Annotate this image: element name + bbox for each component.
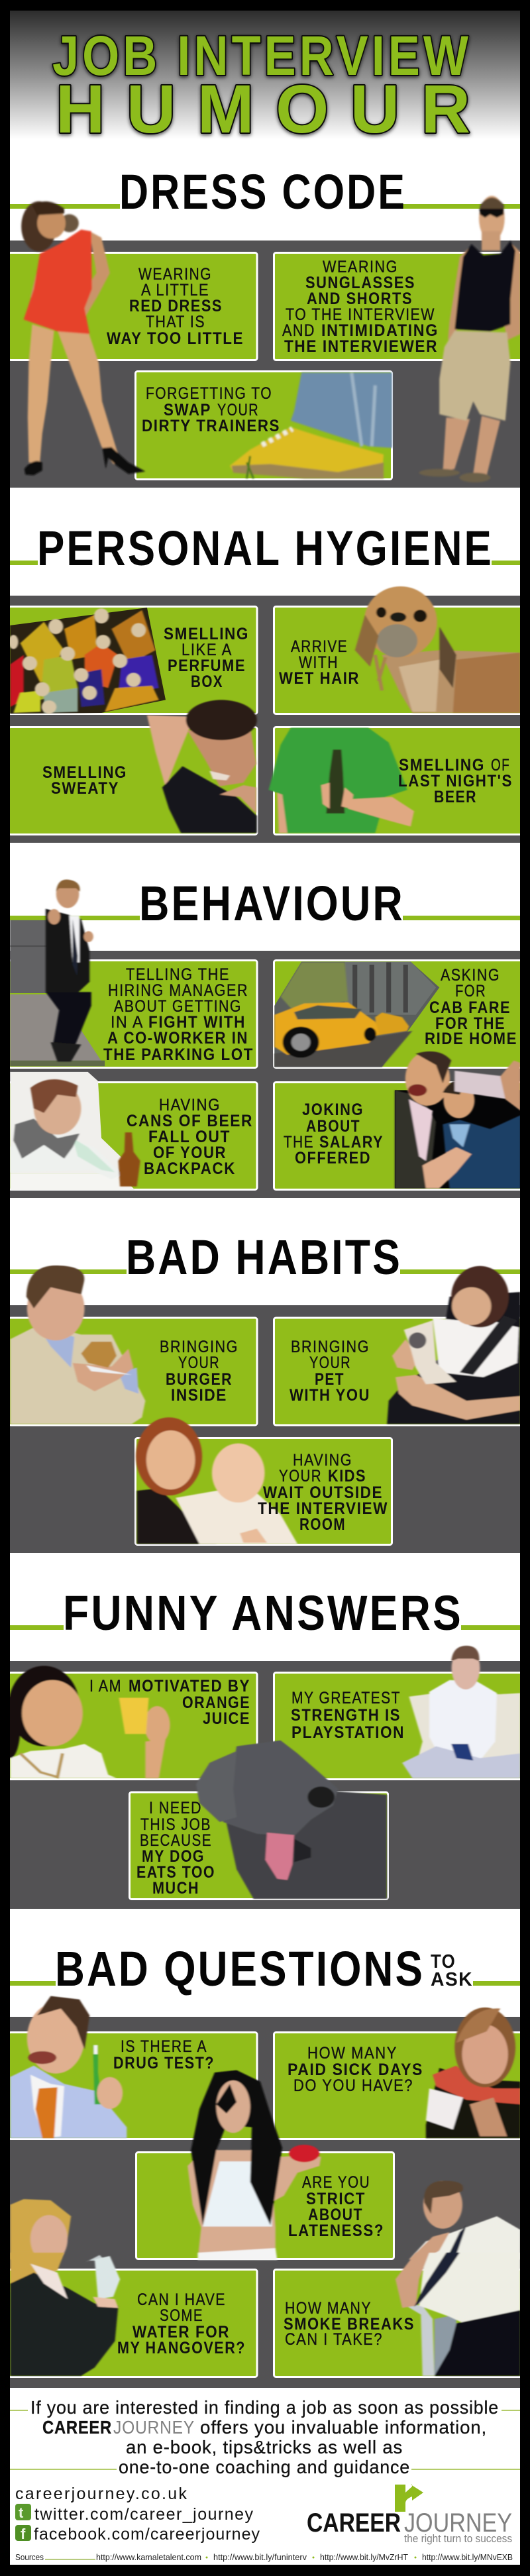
text: cans of beer: CANS OF BEER [127, 1112, 253, 1130]
panel: dress code [9, 164, 522, 488]
logo: career journey [307, 2485, 512, 2545]
call to action: CAREER [42, 2417, 112, 2438]
text: orange juice [89, 1677, 250, 1728]
text: lateness: STRICT [306, 2190, 366, 2208]
text: cans of beer: HAVING [159, 1096, 221, 1114]
text: salary: THE [284, 1133, 314, 1152]
card: burger [9, 1318, 257, 1425]
text: lateness: LATENESS? [288, 2222, 384, 2240]
text: sweaty: SMELLING [42, 763, 127, 782]
photo: man smoking (lower) [396, 2253, 521, 2376]
text: red dress [107, 265, 244, 348]
text: salary: JOKING [302, 1100, 364, 1119]
text: perfume [164, 625, 249, 691]
call to action: offers you invaluable information, [200, 2417, 487, 2438]
text: salary: SALARY [319, 1133, 384, 1152]
text: burger: BRINGING [160, 1338, 238, 1356]
text: burger: INSIDE [171, 1386, 227, 1405]
text: sunglasses: AND SHORTS [307, 290, 413, 308]
photo: woman with cat [387, 1266, 521, 1424]
text: sunglasses: SUNGLASSES [305, 274, 415, 292]
text: smoke breaks: CAN I TAKE? [285, 2330, 383, 2349]
text: perfume: SMELLING [164, 625, 249, 643]
text: smoke breaks: SMOKE BREAKS [284, 2315, 415, 2334]
text: salary: OFFERED [295, 1149, 371, 1167]
card: wet hair [274, 607, 522, 714]
text: wet hair [279, 637, 360, 688]
icon: arrow [395, 2485, 423, 2512]
text: fight: FIGHT WITH [148, 1013, 246, 1032]
call to action: one-to-one coaching and guidance [119, 2457, 410, 2477]
card: orange juice [9, 1672, 257, 1780]
text: my dog: BECAUSE [140, 1831, 212, 1850]
card: cans of beer [9, 1083, 257, 1190]
text: playstation [291, 1689, 405, 1742]
text: kids: ROOM [299, 1515, 346, 1534]
text: sunglasses: AND [282, 321, 315, 340]
sources: http://www.bit.ly/funinterv [213, 2552, 307, 2562]
card: drug test [9, 2033, 257, 2139]
text: sunglasses: INTIMIDATING [321, 321, 439, 340]
text: pet: YOUR [309, 1354, 351, 1372]
heading: bad habits [10, 1230, 520, 1285]
heading: funny answers: FUNNY ANSWERS [63, 1585, 463, 1640]
text: wet hair: WET HAIR [279, 669, 360, 688]
card: red dress [9, 253, 257, 360]
photo: man smoking (upper) [409, 2181, 521, 2259]
text: sweaty [42, 763, 127, 798]
sources [15, 2552, 513, 2562]
card: beer [274, 727, 522, 835]
card: cab fare [274, 961, 522, 1068]
text: drug test: IS THERE A [121, 2037, 207, 2056]
title [52, 25, 472, 147]
text: fight: IN A [111, 1013, 144, 1032]
photo: dirty trainer [230, 372, 392, 478]
text: red dress: WAY TOO LITTLE [107, 329, 244, 348]
website and social links: twitter.com/career_journey [34, 2505, 253, 2524]
text: orange juice: MOTIVATED BY [129, 1677, 250, 1695]
call to action: an e-book, tips&tricks as well as [126, 2437, 403, 2457]
text: dirty trainers [142, 384, 280, 435]
sources: http://www.bit.ly/MNvEXB [422, 2552, 513, 2562]
text: kids: WAIT OUTSIDE [263, 1483, 383, 1502]
photo: man eating burger [10, 1265, 145, 1424]
text: red dress: RED DRESS [129, 297, 223, 315]
text: pet: WITH YOU [290, 1386, 370, 1405]
photo: man smelling armpit [147, 700, 257, 833]
heading: bad questions to ask: TO [431, 1951, 456, 1972]
text: salary [284, 1100, 384, 1167]
text: perfume: PERFUME [168, 657, 246, 675]
panel: bad questions to ask [9, 1941, 522, 2388]
text: orange juice: I AM [89, 1677, 122, 1695]
text: fight: HIRING MANAGER [108, 981, 248, 1000]
heading: behaviour: BEHAVIOUR [139, 876, 405, 931]
text: paid sick days [288, 2044, 423, 2095]
text: sunglasses: WEARING [323, 258, 398, 276]
heading: dress code: DRESS CODE [119, 164, 407, 219]
call to action: JOURNEY [113, 2417, 195, 2438]
panel: bad habits [9, 1230, 522, 1553]
photo: perfume bottles [9, 608, 166, 714]
text: cab fare [425, 966, 517, 1048]
text: kids: HAVING [293, 1451, 352, 1470]
logo: career journey: the right turn to success [404, 2532, 512, 2545]
card: fight with co-worker [9, 961, 257, 1068]
text: dirty trainers: SWAP [164, 401, 211, 419]
text: perfume: LIKE A [182, 641, 233, 659]
text: paid sick days: PAID SICK DAYS [288, 2061, 423, 2079]
text: smoke breaks [284, 2299, 415, 2349]
text: last night's beer: SMELLING [399, 756, 485, 775]
text: sunglasses [282, 258, 439, 356]
logo: career journey: CAREER [307, 2508, 401, 2538]
photo: blonde woman in suit (upper) [10, 2199, 105, 2263]
logo: career journey: JOURNEY [404, 2508, 512, 2538]
text: sunglasses: THE INTERVIEWER [284, 337, 438, 356]
text: pet [290, 1338, 370, 1405]
text: drug test: DRUG TEST? [113, 2054, 215, 2072]
photo: woman with long black hair and clock [187, 2070, 321, 2260]
text: cab fare: FOR THE [435, 1014, 505, 1033]
text: pet: BRINGING [291, 1338, 370, 1356]
text: cab fare: FOR [455, 982, 486, 1000]
text: fight: ABOUT GETTING [114, 997, 242, 1016]
photo: woman with orange juice [0, 1666, 170, 1778]
card: smoke breaks [274, 2270, 522, 2377]
text: kids [258, 1451, 388, 1534]
heading: bad questions to ask: ASK [431, 1969, 473, 1990]
text: perfume: BOX [191, 672, 223, 691]
text: drug test [113, 2037, 215, 2072]
text: cab fare: RIDE HOME [425, 1030, 517, 1048]
heading: behaviour [10, 876, 520, 931]
text: hangover: MY HANGOVER? [117, 2339, 246, 2357]
text: lateness: ARE YOU [302, 2173, 370, 2192]
text: sunglasses: TO THE INTERVIEW [286, 305, 435, 324]
panel: funny answers [0, 1585, 522, 1909]
text: hangover [117, 2290, 246, 2357]
text: cab fare: ASKING [441, 966, 500, 985]
text: cans of beer: FALL OUT [148, 1128, 231, 1146]
photo: yellow taxi [274, 961, 439, 1067]
sources: Sources [15, 2552, 44, 2562]
panel: personal hygiene [9, 521, 522, 843]
card: perfume [9, 607, 257, 714]
photo: woman with playstation controller [402, 1646, 521, 1778]
card: lateness [136, 2152, 394, 2259]
text: red dress: THAT IS [146, 313, 205, 331]
photo: wet dog [355, 586, 521, 713]
text: burger: YOUR [178, 1354, 220, 1372]
website and social links: facebook.com/careerjourney [34, 2525, 260, 2544]
text: cab fare: CAB FARE [429, 998, 511, 1017]
text: my dog: THIS JOB [140, 1815, 211, 1834]
text: last night's beer: BEER [434, 788, 477, 806]
call to action: If you are interested in finding a job as soon as possible [30, 2397, 499, 2418]
text: cans of beer: OF YOUR [153, 1144, 227, 1162]
text: fight: TELLING THE [126, 965, 230, 984]
text: dirty trainers: FORGETTING TO [146, 384, 272, 403]
website and social links: careerjourney.co.uk [15, 2485, 187, 2503]
photo: green shirt man hiding beer [269, 728, 414, 833]
text: last night's beer: LAST NIGHT'S [398, 772, 513, 790]
text: lateness: ABOUT [308, 2206, 363, 2224]
text: pet: PET [315, 1370, 344, 1389]
text: paid sick days: DO YOU HAVE? [293, 2076, 413, 2095]
text: burger [160, 1338, 238, 1405]
icon: facebook [15, 2525, 31, 2542]
text: red dress: A LITTLE [141, 281, 209, 299]
card: pet [274, 1318, 522, 1425]
text: paid sick days: HOW MANY [307, 2044, 398, 2063]
text: fight: A CO-WORKER IN [107, 1029, 248, 1047]
photo: man in suit gesturing [10, 880, 105, 1066]
text: last night's beer: OF [491, 756, 510, 775]
photo: mother and baby [136, 1417, 297, 1544]
heading: bad questions to ask: BAD QUESTIONS [55, 1941, 425, 1996]
card: salary [274, 1083, 522, 1190]
text: fight: THE PARKING LOT [103, 1046, 254, 1064]
text: sweaty: SWEATY [51, 779, 119, 798]
card: dirty trainers [135, 371, 392, 480]
text: cans of beer [127, 1096, 253, 1178]
card: hangover [9, 2270, 257, 2377]
photo: hungover man with bottle [10, 1072, 140, 1190]
panel: behaviour [9, 876, 522, 1198]
text: burger: BURGER [166, 1370, 233, 1389]
header gradient [10, 11, 520, 139]
text: playstation: PLAYSTATION [292, 1723, 405, 1742]
sources: http://www.bit.ly/MvZrHT [320, 2552, 408, 2562]
card: sunglasses [274, 253, 522, 360]
text: smoke breaks: HOW MANY [285, 2299, 372, 2318]
photo: woman in red dress [21, 201, 145, 475]
card: my dog [130, 1792, 388, 1899]
website and social links [15, 2485, 260, 2544]
text: my dog: MUCH [152, 1879, 199, 1898]
text: hangover: SOME [160, 2306, 203, 2325]
text: fight [103, 965, 254, 1064]
text: wet hair: ARRIVE [291, 637, 348, 656]
text: dirty trainers: YOUR [217, 401, 259, 419]
photo: blonde woman in suit (lower) [10, 2253, 120, 2376]
photo: frowning woman with mug [426, 2008, 521, 2138]
text: orange juice: JUICE [203, 1709, 250, 1728]
photo: man in sunglasses and shorts [419, 196, 521, 482]
title: JOB INTERVIEW [52, 25, 472, 87]
icon: twitter: t [19, 2504, 24, 2521]
text: dirty trainers: DIRTY TRAINERS [142, 417, 280, 435]
text: hangover: CAN I HAVE [137, 2290, 226, 2309]
text: kids: YOUR [279, 1467, 322, 1485]
text: wet hair: WITH [299, 653, 339, 672]
photo: great dane [196, 1741, 387, 1899]
text: my dog: MY DOG [142, 1847, 205, 1866]
heading: dress code [10, 164, 520, 219]
text: my dog [136, 1799, 215, 1898]
sources: http://www.kamaletalent.com [96, 2552, 201, 2562]
text: my dog: I NEED [149, 1799, 202, 1817]
footer [10, 2397, 520, 2562]
text: salary: ABOUT [306, 1117, 360, 1136]
text: kids: THE INTERVIEW [258, 1499, 388, 1518]
text: cans of beer: BACKPACK [144, 1159, 236, 1178]
title: HUMOUR [56, 71, 470, 147]
photo: man with test tube [10, 1996, 127, 2138]
text: playstation: MY GREATEST [292, 1689, 401, 1707]
card: kids [135, 1438, 392, 1545]
card: paid sick days [274, 2033, 522, 2139]
text: lateness [288, 2173, 384, 2240]
icon: facebook: f [21, 2526, 26, 2542]
text: playstation: STRENGTH IS [291, 1706, 401, 1725]
text: red dress: WEARING [138, 265, 212, 284]
text: hangover: WATER FOR [132, 2323, 230, 2341]
text: my dog: EATS TOO [136, 1863, 215, 1882]
heading: bad habits: BAD HABITS [126, 1230, 402, 1285]
photo: two men joking with banknote [395, 1051, 521, 1188]
text: last night's beer [398, 756, 513, 806]
icon: twitter [15, 2504, 31, 2521]
call to action [10, 2397, 520, 2477]
card: playstation [274, 1672, 522, 1780]
card: sweaty [9, 727, 257, 835]
text: orange juice: ORANGE [182, 1693, 250, 1712]
text: kids: KIDS [328, 1467, 366, 1485]
